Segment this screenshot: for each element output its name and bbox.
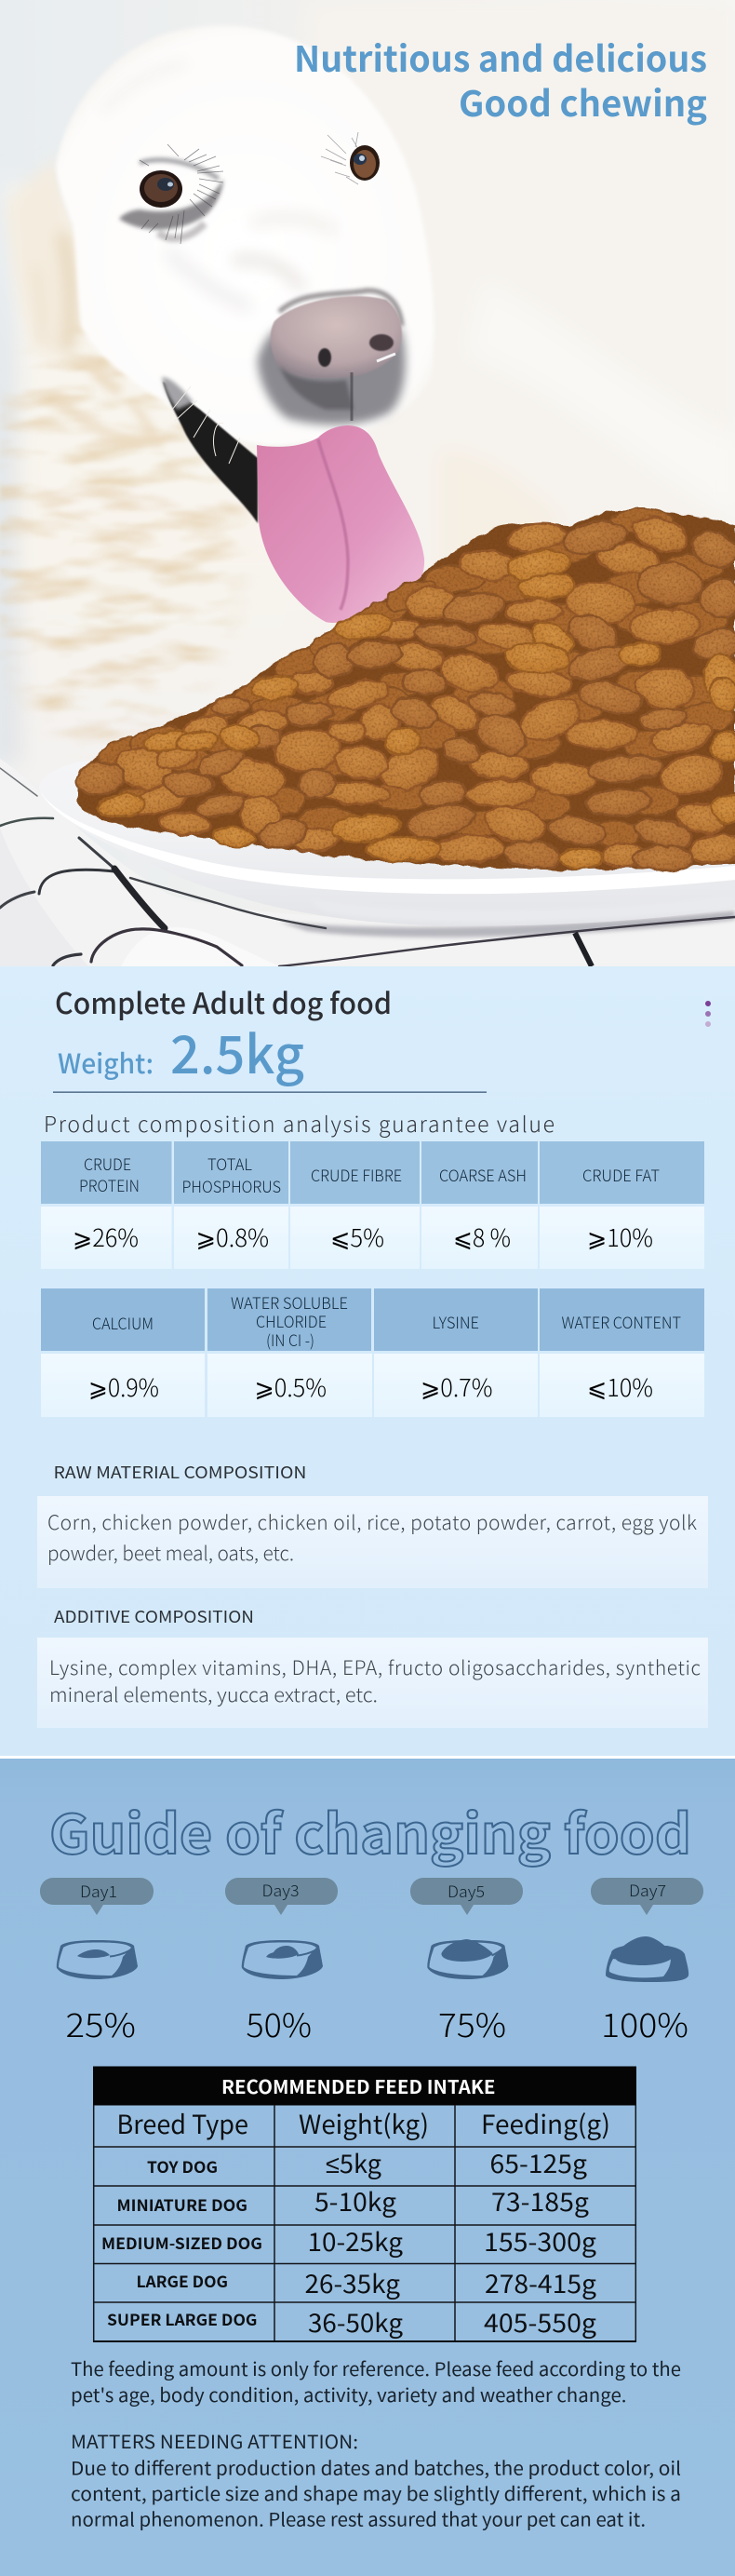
hero headline: Nutritious and delicious <box>294 31 707 82</box>
icon: bowl 100% <box>606 1936 688 1982</box>
hero photo: dog and bowl of kibble <box>0 0 735 966</box>
table: guarantee row 2: LYSINE <box>432 1310 479 1333</box>
guide title: Guide of changing food <box>49 1791 691 1869</box>
icon: three dots <box>705 1001 711 1027</box>
percent row: 25% <box>65 2000 136 2047</box>
dog eyes <box>119 132 380 244</box>
table: recommended feed intake: 278-415g <box>485 2264 596 2300</box>
table: guarantee row 2: CALCIUM <box>92 1311 154 1334</box>
table: recommended feed intake: 26-35kg <box>305 2264 400 2300</box>
table: guarantee row 1: CRUDE <box>84 1152 131 1175</box>
kibble pile <box>73 509 735 871</box>
percent row: 75% <box>438 2000 506 2047</box>
day 7 bubble <box>591 1878 703 1915</box>
feeding note: pet's age, body condition, activity, variety and weather change. <box>71 2380 627 2407</box>
raw material text box: powder, beet meal, oats, etc. <box>47 1539 294 1567</box>
table: recommended feed intake: SUPER LARGE DOG <box>107 2307 257 2330</box>
table: guarantee row 1: ⩽8 % <box>453 1220 511 1254</box>
attention note: MATTERS NEEDING ATTENTION: <box>71 2427 358 2454</box>
attention note: Due to different production dates and batches, the product color, oil <box>71 2454 681 2480</box>
table: recommended feed intake: Breed Type <box>117 2105 248 2142</box>
day 1 bubble: Day1 <box>80 1879 117 1902</box>
table: guarantee row 2: (IN CI -) <box>266 1328 314 1351</box>
table: recommended feed intake: Weight(kg) <box>299 2105 429 2142</box>
table: recommended feed intake: Feeding(g) <box>481 2105 610 2142</box>
table: guarantee row 2: WATER CONTENT <box>562 1310 681 1333</box>
table: recommended feed intake: 73-185g <box>491 2182 589 2219</box>
icon: bowl 75% <box>427 1939 508 1979</box>
table: guarantee row 2: ⩽10% <box>587 1369 653 1404</box>
percent row: 50% <box>246 2000 312 2047</box>
table: recommended feed intake: 36-50kg <box>308 2303 403 2340</box>
panel: feeding guide <box>0 1759 735 2576</box>
day 7 bubble: Day7 <box>629 1878 666 1901</box>
table: guarantee row 2: ⩾0.5% <box>255 1369 327 1404</box>
table: recommended feed intake: MINIATURE DOG <box>117 2192 247 2216</box>
attention note: normal phenomenon. Please rest assured that your pet can eat it. <box>71 2504 646 2532</box>
table: recommended feed intake: TOY DOG <box>147 2154 218 2178</box>
table: guarantee row 2 <box>41 1288 704 1417</box>
day 3 bubble <box>225 1878 338 1915</box>
additive text box <box>37 1638 708 1728</box>
raw material heading: RAW MATERIAL COMPOSITION <box>54 1460 307 1484</box>
hero headline <box>294 31 707 127</box>
day 5 bubble: Day5 <box>448 1879 485 1902</box>
table: guarantee row 1: COARSE ASH <box>439 1163 527 1186</box>
tablecloth <box>0 759 735 966</box>
weight label: 2.5kg <box>170 1014 304 1089</box>
dog mouth <box>162 377 258 523</box>
weight label <box>58 1014 304 1089</box>
table: recommended feed intake: 5-10kg <box>314 2182 396 2219</box>
filler kibbles <box>95 509 733 845</box>
raw material text box <box>37 1496 708 1588</box>
table: guarantee row 1: ⩾26% <box>73 1220 139 1254</box>
day 3 bubble: Day3 <box>262 1878 300 1901</box>
day 1 bubble <box>40 1878 154 1915</box>
table: recommended feed intake: 10-25kg <box>307 2222 403 2259</box>
dog tongue <box>257 425 424 623</box>
table: guarantee row 1 <box>41 1141 704 1269</box>
additive text box: mineral elements, yucca extract, etc. <box>49 1680 378 1708</box>
dog ear <box>7 158 79 358</box>
dog fur shading <box>102 63 335 307</box>
panel: composition <box>0 966 735 1756</box>
feeding note <box>71 2354 681 2407</box>
hero headline: Good chewing <box>459 75 707 127</box>
table: recommended feed intake: MEDIUM-SIZED DOG <box>101 2231 262 2254</box>
white plate <box>39 717 735 925</box>
percent row: 100% <box>601 2000 688 2047</box>
table: guarantee row 1: ⩽5% <box>330 1220 384 1254</box>
dog body fur texture <box>0 326 248 743</box>
table: guarantee row 2: CHLORIDE <box>256 1309 327 1332</box>
table: recommended feed intake <box>93 2067 636 2342</box>
table: guarantee row 2: WATER SOLUBLE <box>231 1290 348 1314</box>
table: recommended feed intake: ≤5kg <box>326 2144 381 2180</box>
icon: bowl 50% <box>242 1940 323 1979</box>
raw material text box: Corn, chicken powder, chicken oil, rice, potato powder, carrot, egg yolk <box>47 1508 697 1536</box>
percent row <box>65 2000 688 2047</box>
table: guarantee row 1: ⩾0.8% <box>195 1220 269 1254</box>
dog muzzle and nose <box>258 290 406 425</box>
dog head <box>56 25 434 445</box>
additive heading: ADDITIVE COMPOSITION <box>54 1604 254 1628</box>
day 5 bubble <box>410 1878 523 1915</box>
table: guarantee row 2: ⩾0.7% <box>421 1369 493 1404</box>
table: recommended feed intake: 155-300g <box>484 2222 596 2259</box>
additive text box: Lysine, complex vitamins, DHA, EPA, fructo oligosaccharides, synthetic <box>49 1653 701 1681</box>
dog neck shading <box>56 358 158 447</box>
product title: Complete Adult dog food <box>55 980 392 1022</box>
table: recommended feed intake: 405-550g <box>484 2303 596 2340</box>
table: guarantee row 1: CRUDE FIBRE <box>311 1163 402 1186</box>
table: recommended feed intake: RECOMMENDED FEED INTAKE <box>221 2072 495 2099</box>
analysis heading: Product composition analysis guarantee value <box>44 1107 555 1139</box>
table: guarantee row 1: PHOSPHORUS <box>182 1174 281 1197</box>
table: guarantee row 2: ⩾0.9% <box>88 1369 159 1404</box>
table: guarantee row 1: PROTEIN <box>79 1173 140 1196</box>
table: recommended feed intake: LARGE DOG <box>136 2269 228 2292</box>
table: guarantee row 1: ⩾10% <box>587 1220 653 1254</box>
attention note: content, particle size and shape may be slightly different, which is a <box>71 2479 681 2506</box>
table: guarantee row 1: CRUDE FAT <box>582 1163 660 1186</box>
icon: bowl 25% <box>57 1940 138 1979</box>
table: recommended feed intake: 65-125g <box>489 2144 587 2180</box>
attention note <box>71 2427 681 2532</box>
feeding note: The feeding amount is only for reference. Please feed according to the <box>71 2354 681 2381</box>
weight label: Weight: <box>58 1043 154 1082</box>
table: guarantee row 1: TOTAL <box>207 1152 252 1175</box>
